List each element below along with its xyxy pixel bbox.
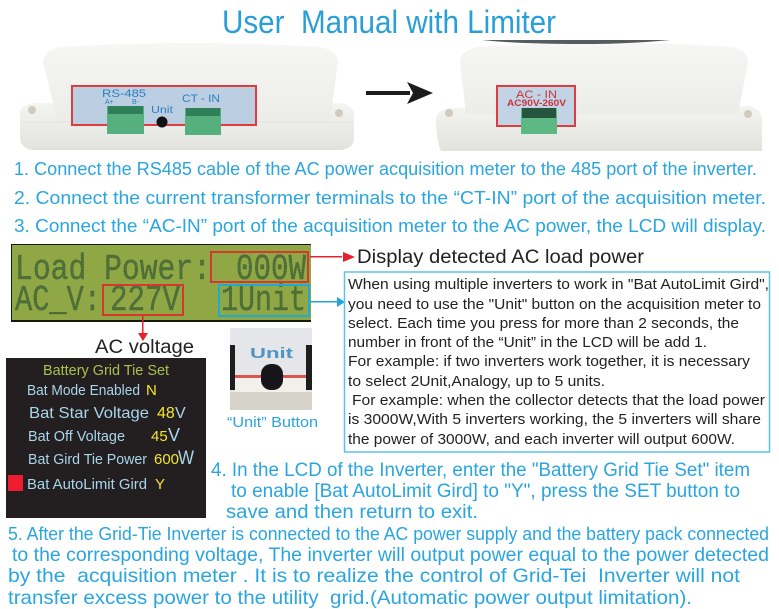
panel: Battery Grid Tie Set screen: Y bbox=[155, 476, 165, 493]
text box: multiple inverters: For example: if two inverters work together, it is necessary bbox=[348, 353, 751, 370]
device photo: RS-485 and CT-IN ports: B- bbox=[132, 99, 140, 106]
device photo: RS-485 and CT-IN ports: Unit bbox=[151, 105, 173, 116]
caption: Unit button: “Unit” Button bbox=[227, 414, 318, 431]
panel: Battery Grid Tie Set screen: Bat Gird Tie Power bbox=[28, 451, 147, 468]
panel: Battery Grid Tie Set screen bbox=[6, 358, 206, 518]
text box: multiple inverters: you need to use the "Unit" button on the acquisition meter to bbox=[348, 296, 761, 313]
LCD display: 000W bbox=[236, 249, 306, 290]
step 5 text: transfer excess power to the utility grid.(Automatic power output limitation). bbox=[8, 587, 692, 609]
device photo: AC-IN port bbox=[436, 40, 762, 151]
step 1 text: 1. Connect the RS485 cable of the AC power acquisition meter to the 485 port of the inverter. bbox=[14, 158, 757, 179]
LCD display bbox=[11, 244, 311, 322]
step 2 text: 2. Connect the current transformer terminals to the “CT-IN” port of the acquisition meter. bbox=[14, 187, 766, 208]
heading: AC voltage: AC voltage bbox=[95, 337, 194, 358]
arrow: unit callout bbox=[310, 297, 345, 307]
step 5 text: by the acquisition meter . It is to realize the control of Grid-Tei Inverter will not bbox=[8, 565, 741, 587]
LCD display: 1Unit bbox=[221, 280, 306, 321]
device photo: RS-485 and CT-IN ports: RS-485 bbox=[102, 88, 146, 100]
text box: multiple inverters: For example: when the collector detects that the load power bbox=[352, 392, 765, 409]
step 5 text: to the corresponding voltage, The inverter will output power equal to the power detected bbox=[12, 545, 769, 566]
arrow: AC voltage bbox=[138, 315, 148, 341]
step 5 text bbox=[8, 523, 769, 609]
panel: Battery Grid Tie Set screen: 600 bbox=[154, 451, 179, 468]
text box: multiple inverters bbox=[344, 272, 770, 452]
photo: Unit button bbox=[230, 328, 312, 410]
panel: Battery Grid Tie Set screen: Battery Grid Tie Set bbox=[43, 362, 170, 379]
panel: Battery Grid Tie Set screen: Bat Star Voltage bbox=[29, 405, 149, 422]
panel: Battery Grid Tie Set screen: 48 bbox=[157, 405, 175, 422]
text box: multiple inverters: select. Each time you press for more than 2 seconds, the bbox=[348, 315, 739, 332]
step 4 text bbox=[211, 460, 750, 523]
panel: Battery Grid Tie Set screen: Bat Off Voltage bbox=[28, 428, 125, 445]
arrow: load power callout bbox=[310, 252, 355, 262]
text box: multiple inverters: number in front of the “Unit” in the LCD will be add 1. bbox=[348, 334, 707, 351]
device photo: AC-IN port: AC90V-260V bbox=[507, 98, 566, 108]
panel: Battery Grid Tie Set screen: Bat Mode Enabled bbox=[27, 382, 140, 399]
text box: multiple inverters: the power of 3000W, and each inverter will output 600W. bbox=[348, 431, 735, 448]
panel: Battery Grid Tie Set screen: 45 bbox=[151, 428, 168, 445]
device photo: RS-485 and CT-IN ports bbox=[20, 43, 354, 150]
device photo: RS-485 and CT-IN ports: A+ bbox=[105, 99, 114, 106]
heading: display detected AC load power: Display detected AC load power bbox=[357, 247, 645, 268]
panel: Battery Grid Tie Set screen: V bbox=[168, 425, 180, 445]
panel: Battery Grid Tie Set screen: Bat AutoLimit Gird bbox=[27, 476, 147, 493]
photo: Unit button: Unit bbox=[250, 345, 293, 362]
step 4 text: save and then return to exit. bbox=[226, 502, 478, 523]
title: User Manual with Limiter bbox=[222, 4, 556, 40]
text box: multiple inverters: is 3000W,With 5 inverters working, the 5 inverters will share bbox=[348, 411, 761, 428]
device photo: RS-485 and CT-IN ports: CT - IN bbox=[182, 93, 220, 105]
device photo: AC-IN port: AC - IN bbox=[516, 89, 557, 101]
text box: multiple inverters: to select 2Unit,Analogy, up to 5 units. bbox=[348, 373, 605, 390]
panel: Battery Grid Tie Set screen: W bbox=[178, 448, 194, 469]
step 4 text: to enable [Bat AutoLimit Gird] to "Y", press the SET button to bbox=[231, 481, 740, 502]
step 4 text: 4. In the LCD of the Inverter, enter the "Battery Grid Tie Set" item bbox=[211, 460, 750, 481]
step 3 text: 3. Connect the “AC-IN” port of the acquisition meter to the AC power, the LCD will display. bbox=[14, 215, 766, 236]
panel: Battery Grid Tie Set screen: N bbox=[146, 382, 157, 399]
panel: Battery Grid Tie Set screen: V bbox=[175, 405, 186, 422]
LCD display: Load Power: bbox=[15, 249, 211, 290]
text box: multiple inverters: When using multiple inverters to work in "Bat AutoLimit Gird", bbox=[348, 276, 769, 293]
LCD display: 227V bbox=[110, 280, 180, 321]
LCD display: AC_V: bbox=[15, 280, 101, 321]
arrow bbox=[366, 82, 433, 104]
